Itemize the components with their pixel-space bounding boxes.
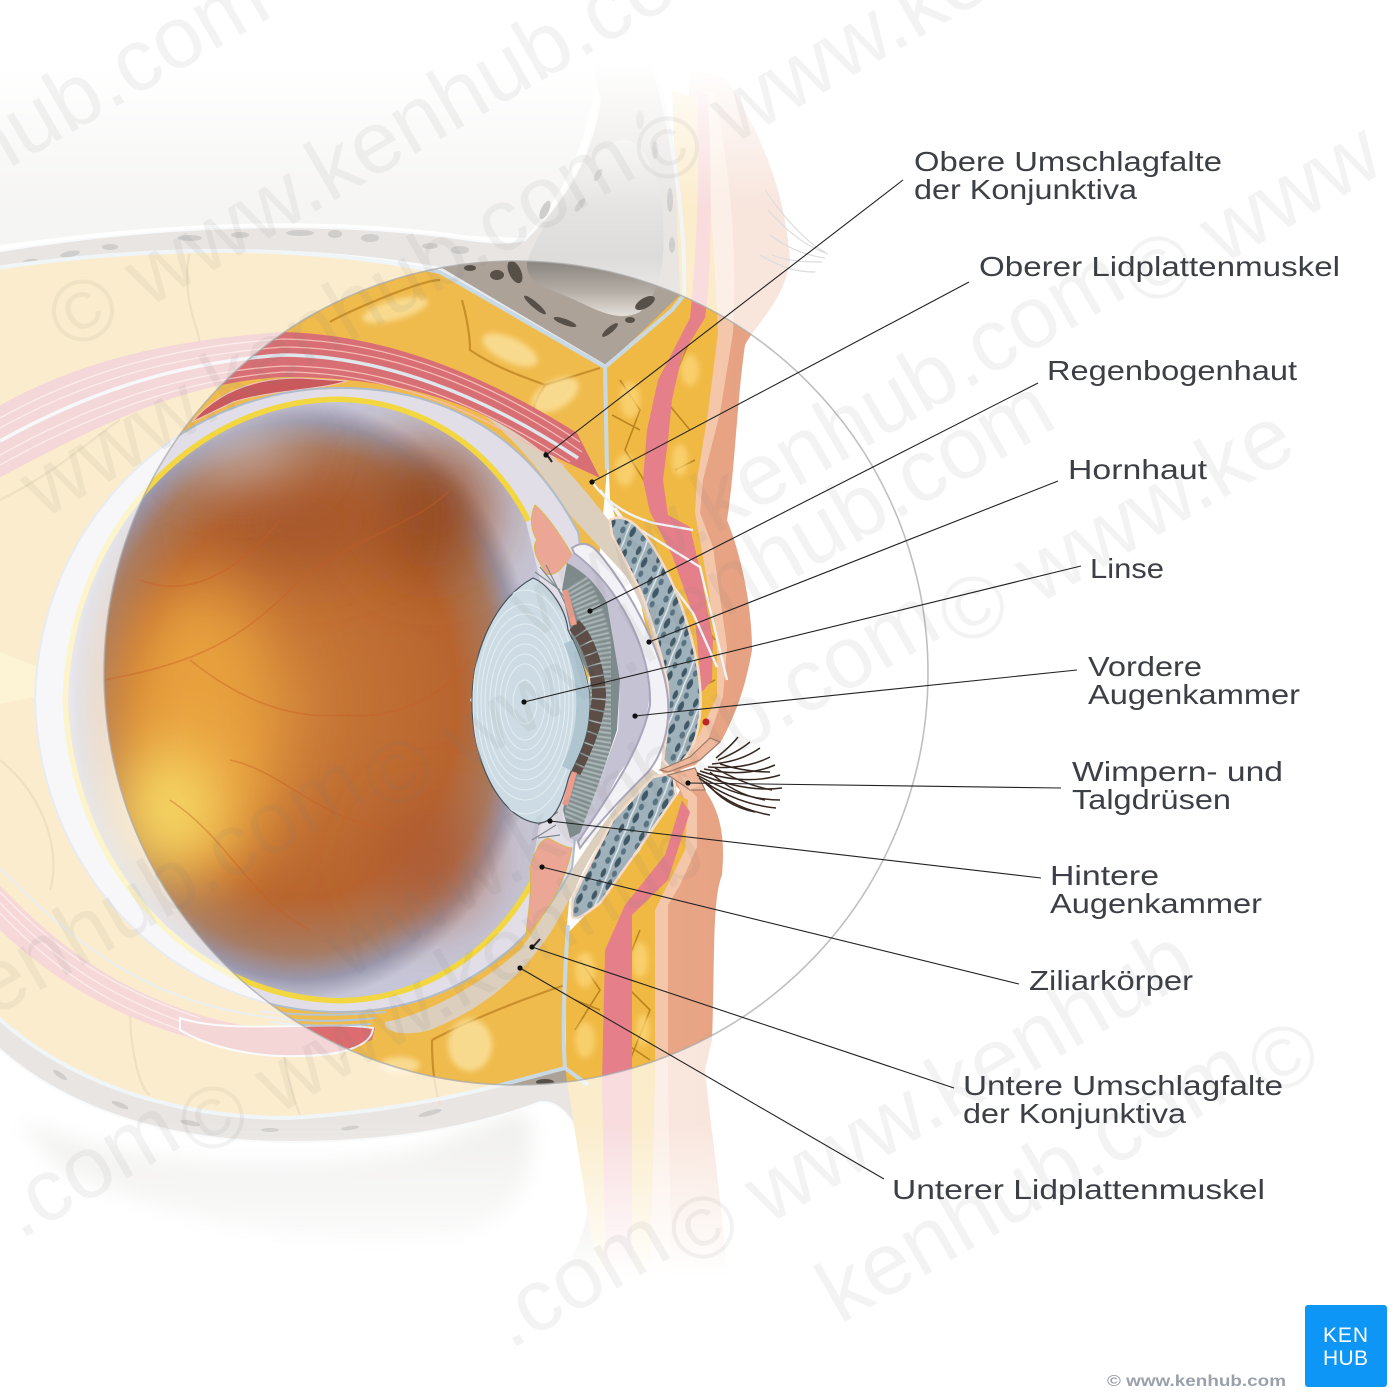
eyelid fat [566,90,718,1290]
watermark: © www.kenhub [650,907,1209,1286]
eyebrow [760,190,828,272]
frontal bone [0,60,684,366]
label: Untere Umschlagfalte der Konjunktiva: Untere Umschlagfalte [963,1070,1283,1101]
label: Hornhaut: Hornhaut [1068,454,1207,485]
orbital fat [0,250,607,1118]
retina yellow layer [68,402,530,998]
upper and lower eyelid skin [610,70,790,1290]
cornea [572,544,668,848]
label: Hintere Augenkammer: Hintere [1050,860,1159,891]
lens [472,578,590,823]
magnifier circle outline [104,261,928,1085]
frontal sinus [527,140,664,316]
Kenhub logo: KEN [1323,1324,1368,1347]
superior rectus [0,332,600,480]
label: Oberer Lidplattenmuskel: Oberer Lidplattenmuskel [979,251,1340,282]
label: Unterer Lidplattenmuskel: Unterer Lidplattenmuskel [892,1174,1265,1205]
label: Vordere Augenkammer [1088,651,1300,710]
label: Linse: Linse [1090,553,1164,584]
label: Hintere Augenkammer: Augenkammer [1050,888,1262,919]
tarsal plate lower [572,773,676,918]
label: Vordere Augenkammer: Vordere [1088,651,1202,682]
cranial cavity and maxillary shadow [0,60,600,1245]
label: Ziliarkörper: Ziliarkörper [1029,965,1193,996]
labels [892,146,1340,1205]
marginal artery [702,718,710,726]
vitreous body [60,400,540,1000]
zonular fibres [532,565,566,840]
iris [562,563,620,838]
anatomy scene: full-colour section [0,60,828,1290]
label: Untere Umschlagfalte der Konjunktiva [963,1070,1283,1129]
fade at bottom [188,1148,728,1279]
tarsal plate upper [610,518,701,770]
watermark: www.kenhub.com [307,566,954,997]
levator aponeurosis strands [592,482,727,680]
orbicularis muscle bands [602,90,713,1290]
inferior rectus [0,880,375,1051]
optic nerve [0,650,70,705]
label: Regenbogenhaut: Regenbogenhaut [1047,355,1297,386]
label: Untere Umschlagfalte der Konjunktiva: der Konjunktiva [963,1098,1186,1129]
lid margin [660,738,720,790]
copyright line: © www.kenhub.com [1107,1373,1286,1390]
label: Vordere Augenkammer: Augenkammer [1088,679,1300,710]
label: Obere Umschlagfalte der Konjunktiva: Obere Umschlagfalte [914,146,1222,177]
label: Obere Umschlagfalte der Konjunktiva [914,146,1222,205]
white veil outside the magnified circle [0,74,828,1270]
lower tan layer [385,768,660,1033]
Kenhub logo [1305,1305,1387,1387]
lid gland orifice [680,775,700,790]
bone pores [22,111,675,339]
label: Obere Umschlagfalte der Konjunktiva: der Konjunktiva [914,174,1137,205]
label: Hintere Augenkammer [1050,860,1262,919]
watermark: kenhub.com [800,1016,1264,1341]
anterior chamber [567,552,650,842]
watermark: www.kenhub.com [2,106,650,537]
conjunctival fornices [531,452,552,949]
watermark: © www.kenhub [160,797,719,1176]
watermark: © www [1105,101,1397,326]
watermark: © [1230,998,1336,1116]
Kenhub logo: HUB [1323,1347,1368,1370]
eyelid peach layer [648,90,734,1290]
watermark: www.kenhub.com [492,226,1140,657]
extraocular muscles [0,332,600,1056]
fade at top [0,0,1400,62]
leader lines and dots [517,180,1081,1179]
watermark: © www.kenhub.com [345,356,1069,831]
watermark: © www.ke [920,384,1309,666]
label: Wimpern- und Talgdrüsen: Talgdrüsen [1072,784,1231,815]
watermark: .com [470,1186,684,1367]
conjunctiva and tan layer upper [470,395,678,770]
orbital floor bone [0,1015,618,1285]
vertical septum lines [0,70,684,1118]
eyelashes [697,737,782,815]
ciliary body upper [531,505,575,575]
ciliary body lower [526,838,572,935]
label: Wimpern- und Talgdrüsen [1072,756,1283,815]
label: Wimpern- und Talgdrüsen: Wimpern- und [1072,756,1283,787]
sclera [35,388,584,1012]
